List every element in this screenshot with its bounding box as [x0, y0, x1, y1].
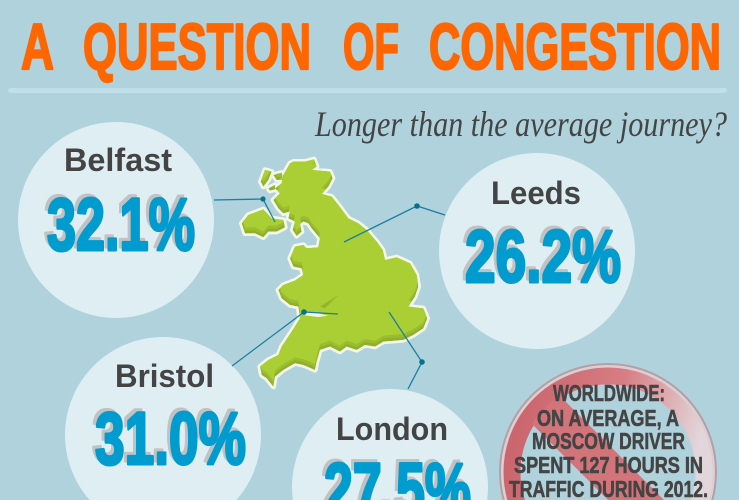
- callout text: ON AVERAGE, A: [537, 405, 679, 431]
- Belfast value: 32.1%: [47, 183, 195, 266]
- Leeds value: 26.2%: [465, 215, 621, 298]
- Leeds label: Leeds: [491, 175, 581, 211]
- panel: Belfast: [18, 122, 214, 318]
- Leeds value: 26.2%: [462, 212, 618, 295]
- panel: Leeds: [439, 153, 635, 349]
- UK map: [242, 153, 427, 387]
- callout text: MOSCOW DRIVER: [532, 428, 685, 454]
- title: A: [21, 10, 54, 83]
- connector: Bristol: [232, 309, 338, 366]
- callout: no-entry sign: [499, 363, 717, 500]
- title: QUESTION: [83, 10, 311, 83]
- icon: prohibition sign: [499, 363, 717, 500]
- Bristol value: 31.0%: [95, 397, 246, 480]
- callout text: [509, 380, 708, 500]
- connector: Belfast: [214, 196, 275, 222]
- connector: Leeds: [344, 203, 445, 242]
- callout text: WORLDWIDE:: [553, 380, 665, 406]
- Belfast value: 32.1%: [44, 180, 192, 263]
- panel: Bristol: [65, 337, 261, 500]
- connector: London: [389, 312, 425, 389]
- Bristol label: Bristol: [115, 358, 214, 394]
- panel: London: [292, 389, 488, 500]
- London label: London: [336, 411, 448, 447]
- Bristol value: 31.0%: [92, 394, 243, 477]
- Belfast label: Belfast: [64, 142, 172, 178]
- title: OF: [343, 10, 399, 83]
- title: [21, 10, 721, 83]
